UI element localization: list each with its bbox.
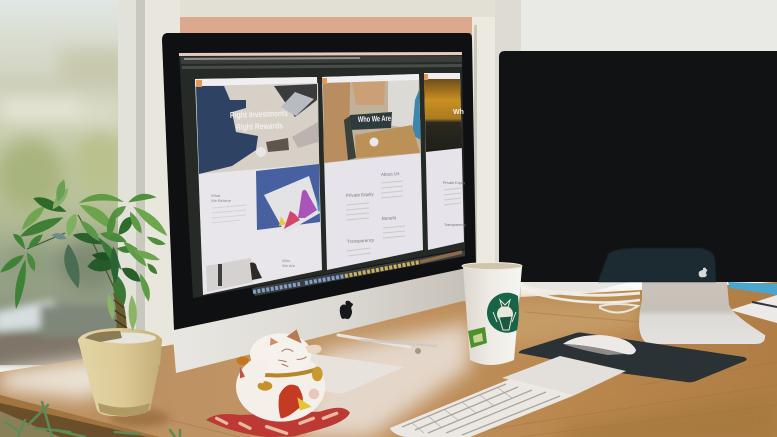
left iMac: [162, 33, 476, 373]
monitor stand: [639, 282, 765, 344]
small trackpad by left monitor: [290, 352, 404, 394]
silver chin: [172, 262, 476, 373]
papers with pen: [730, 295, 777, 323]
section text: What: [211, 193, 221, 198]
white pen/cable on desk: [338, 335, 436, 354]
screen reflection: [598, 248, 716, 282]
section text: Private Equity: [346, 192, 375, 198]
hero heading: Who We Are: [358, 114, 391, 124]
pot shadow: [110, 409, 170, 427]
page panel 1: We Are: [282, 263, 296, 268]
apple logo: [340, 301, 353, 319]
collar and bells: [257, 370, 315, 375]
dock: [252, 250, 465, 296]
bottom photo: [206, 258, 253, 292]
bib: [279, 385, 303, 418]
page panel 2: Transparency: [347, 238, 375, 244]
coffee cup: [462, 262, 522, 365]
window sill edge with small plant: [0, 395, 180, 437]
page panel 1: [195, 77, 322, 295]
leaves: [0, 179, 167, 331]
lucky cat figurine: [206, 329, 350, 437]
hero heading: Right Investments: [230, 108, 288, 120]
blue card with tablet chart: [256, 164, 320, 233]
page panel 3: Wh: [453, 109, 464, 116]
page panel 1: Who: [282, 258, 291, 263]
right monitor: [499, 51, 777, 344]
hero image: [196, 83, 319, 174]
black display: [499, 51, 777, 282]
page panel 2: Benefit: [382, 215, 397, 221]
mouse: [563, 335, 636, 355]
trunk: [113, 292, 127, 337]
page panel 3: Transparency: [444, 223, 466, 227]
starbucks logo: [487, 293, 519, 333]
page panel 2: About Us: [381, 171, 400, 177]
potted plant: [0, 179, 170, 427]
page panel 2: [322, 74, 423, 270]
menu bar: [179, 52, 462, 56]
mousepad: [519, 332, 747, 382]
paw: [251, 360, 268, 383]
keyboard and trackpad: [390, 356, 626, 437]
apple logo: [699, 268, 707, 277]
page panel 3: Private Equity: [443, 181, 465, 185]
window frame and wall: [118, 0, 777, 350]
header strip: [195, 77, 317, 86]
page panel 1: Right Rewards: [236, 120, 283, 132]
body: [236, 352, 325, 422]
page panel 1: We Believe: [211, 198, 232, 203]
right-side papers and cables: [520, 282, 777, 323]
wooden desk: [0, 282, 777, 437]
window view: blurred outdoor scenery: [0, 0, 130, 365]
black bezel: [162, 33, 476, 330]
face: [278, 349, 307, 367]
red cushion: [206, 408, 350, 437]
blue object: [728, 282, 777, 295]
green tag: [468, 327, 487, 348]
page panel 3: [424, 73, 466, 250]
screen: [179, 52, 466, 298]
head: [250, 333, 311, 375]
terracotta pot: [78, 328, 162, 416]
